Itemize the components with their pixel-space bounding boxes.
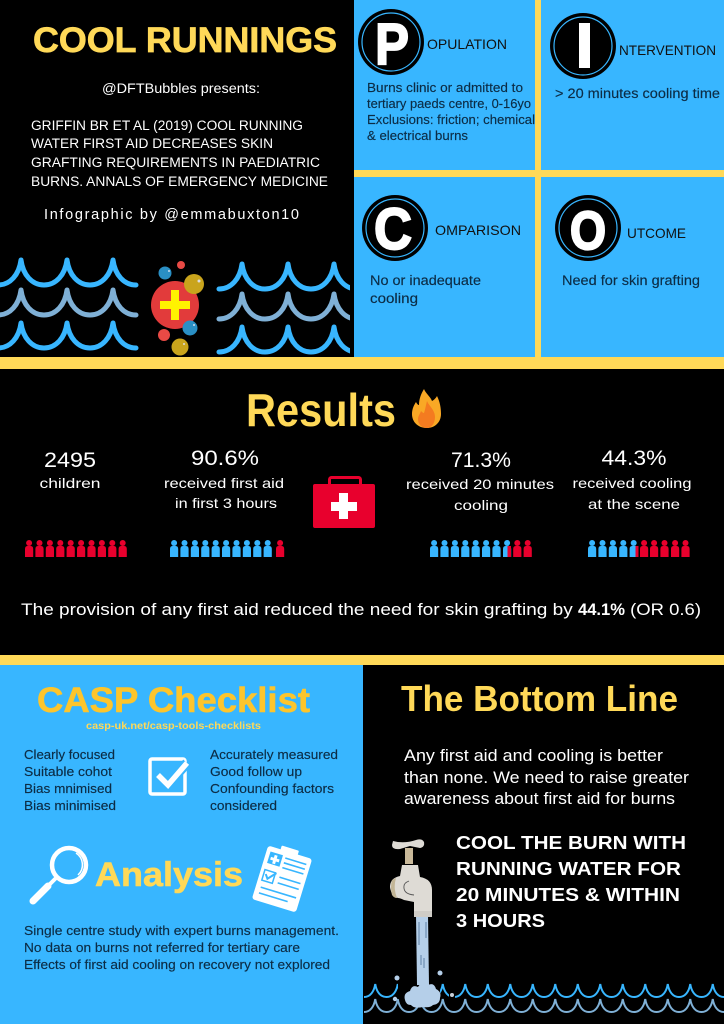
checklist right: Confounding factors (210, 781, 335, 796)
stat: 20 minutes (406, 449, 554, 513)
icon: waves right (219, 264, 372, 352)
heading: Results (246, 384, 396, 436)
body: cooling (370, 291, 418, 306)
citation: BURNS. ANNALS OF EMERGENCY MEDICINE (31, 174, 328, 189)
analysis text: Effects of first aid cooling on recovery not explored (24, 957, 330, 972)
checklist right: Accurately measured (210, 747, 338, 762)
icon: letter P (358, 9, 424, 77)
body: No or inadequate (370, 273, 481, 288)
presenter: @DFTBubbles presents: (102, 81, 260, 96)
call to action (456, 833, 686, 931)
checklist right: considered (210, 798, 277, 813)
icon: letter C: C (374, 197, 412, 262)
body (367, 80, 535, 143)
icon: letter O (555, 195, 621, 261)
stat: 20 minutes: received 20 minutes (406, 476, 554, 492)
checklist left: Clearly focused (24, 747, 115, 762)
icon: magnifying glass (33, 848, 86, 901)
analysis text (24, 923, 339, 972)
water line: muted (364, 999, 544, 1012)
icon: waves left (0, 260, 136, 348)
link: casp-uk.net/casp-tools-checklists (86, 721, 261, 732)
heading: NTERVENTION (619, 42, 716, 58)
body (404, 747, 690, 808)
icon: first aid kit (313, 478, 375, 528)
body: than none. We need to raise greater (404, 769, 690, 787)
divider band (0, 655, 724, 665)
water line: muted right (544, 999, 724, 1012)
panel: intervention (550, 13, 720, 101)
citation: GRAFTING REQUIREMENTS IN PAEDIATRIC (31, 155, 320, 170)
body: & electrical burns (367, 128, 468, 143)
stat: first aid: 90.6% (191, 447, 259, 470)
call to action: RUNNING WATER FOR (456, 859, 681, 879)
stat: children: 2495 (44, 449, 96, 472)
stat: children: children (40, 475, 100, 491)
icon: flame (412, 389, 441, 428)
panel: results (21, 384, 701, 619)
checklist left (24, 747, 116, 813)
body: Any first aid and cooling is better (404, 747, 664, 765)
checklist left: Bias minimised (24, 798, 116, 813)
body (370, 273, 481, 306)
stat: 20 minutes: cooling (454, 497, 508, 513)
panel: comparison (362, 195, 521, 306)
citation: WATER FIRST AID DECREASES SKIN (31, 136, 273, 151)
analysis text: Single centre study with expert burns management. (24, 923, 339, 938)
stat: at the scene: 44.3% (602, 447, 666, 470)
analysis text: No data on burns not referred for tertiary care (24, 940, 300, 955)
icon: letter P: P (375, 12, 409, 77)
citation (31, 118, 328, 189)
infographic credit: Infographic by @emmabuxton10 (44, 207, 299, 223)
call to action: COOL THE BURN WITH (456, 833, 686, 853)
pictogram: at the scene (588, 540, 690, 557)
panel: outcome (555, 195, 700, 288)
stat: first aid: received first aid (164, 475, 284, 491)
icon: first aid bubbles (151, 261, 204, 356)
stat: 20 minutes: 71.3% (451, 449, 511, 472)
call to action: 20 MINUTES & WITHIN (456, 885, 680, 905)
heading: CASP: CASP Checklist (37, 681, 310, 720)
heading: The Bottom Line (401, 678, 678, 719)
panel: title block (31, 21, 337, 223)
icon: letter C (362, 195, 428, 262)
checklist left: Bias mnimised (24, 781, 112, 796)
call to action: 3 HOURS (456, 911, 545, 931)
citation: GRIFFIN BR ET AL (2019) COOL RUNNING (31, 118, 303, 133)
heading: OPULATION (427, 36, 507, 52)
stat: first aid: in first 3 hours (175, 495, 277, 511)
pictogram: 20 minutes (430, 540, 532, 557)
title: COOL RUNNINGS (33, 21, 337, 60)
key finding: The provision of any first aid reduced the need for skin grafting by 44.1% (OR 0.6) (21, 601, 701, 619)
icon: clipboard (252, 842, 313, 913)
icon: checkbox (150, 759, 187, 794)
icon: letter I (550, 13, 616, 79)
icon: tap with water (390, 839, 455, 1008)
checklist right (210, 747, 338, 813)
panel: population (358, 9, 535, 143)
body: Burns clinic or admitted to (367, 80, 523, 95)
water line: light (364, 984, 544, 997)
icon: letter O: O (570, 201, 606, 261)
heading: UTCOME (627, 225, 686, 241)
body: tertiary paeds centre, 0-16yo (367, 96, 531, 111)
heading: analysis: Analysis (95, 856, 243, 894)
pictogram: children (25, 540, 127, 557)
divider band (0, 357, 724, 369)
stat: at the scene (572, 447, 692, 512)
stat: at the scene: received cooling (572, 475, 692, 491)
stat: at the scene: at the scene (588, 496, 680, 512)
stat: children (40, 449, 100, 491)
panel: PICO background (354, 0, 724, 357)
pictogram: first aid (170, 540, 284, 557)
body: Need for skin grafting (562, 273, 700, 288)
panel: bottom line (364, 678, 724, 1012)
stat: first aid (164, 447, 284, 511)
heading: OMPARISON (435, 222, 521, 238)
body: > 20 minutes cooling time (555, 86, 720, 101)
checklist left: Suitable cohot (24, 764, 112, 779)
body: awareness about first aid for burns (404, 790, 675, 808)
body: Exclusions: friction; chemical (367, 112, 535, 127)
checklist right: Good follow up (210, 764, 302, 779)
water line: light right (544, 984, 724, 997)
panel: CASP and analysis (0, 665, 363, 1024)
